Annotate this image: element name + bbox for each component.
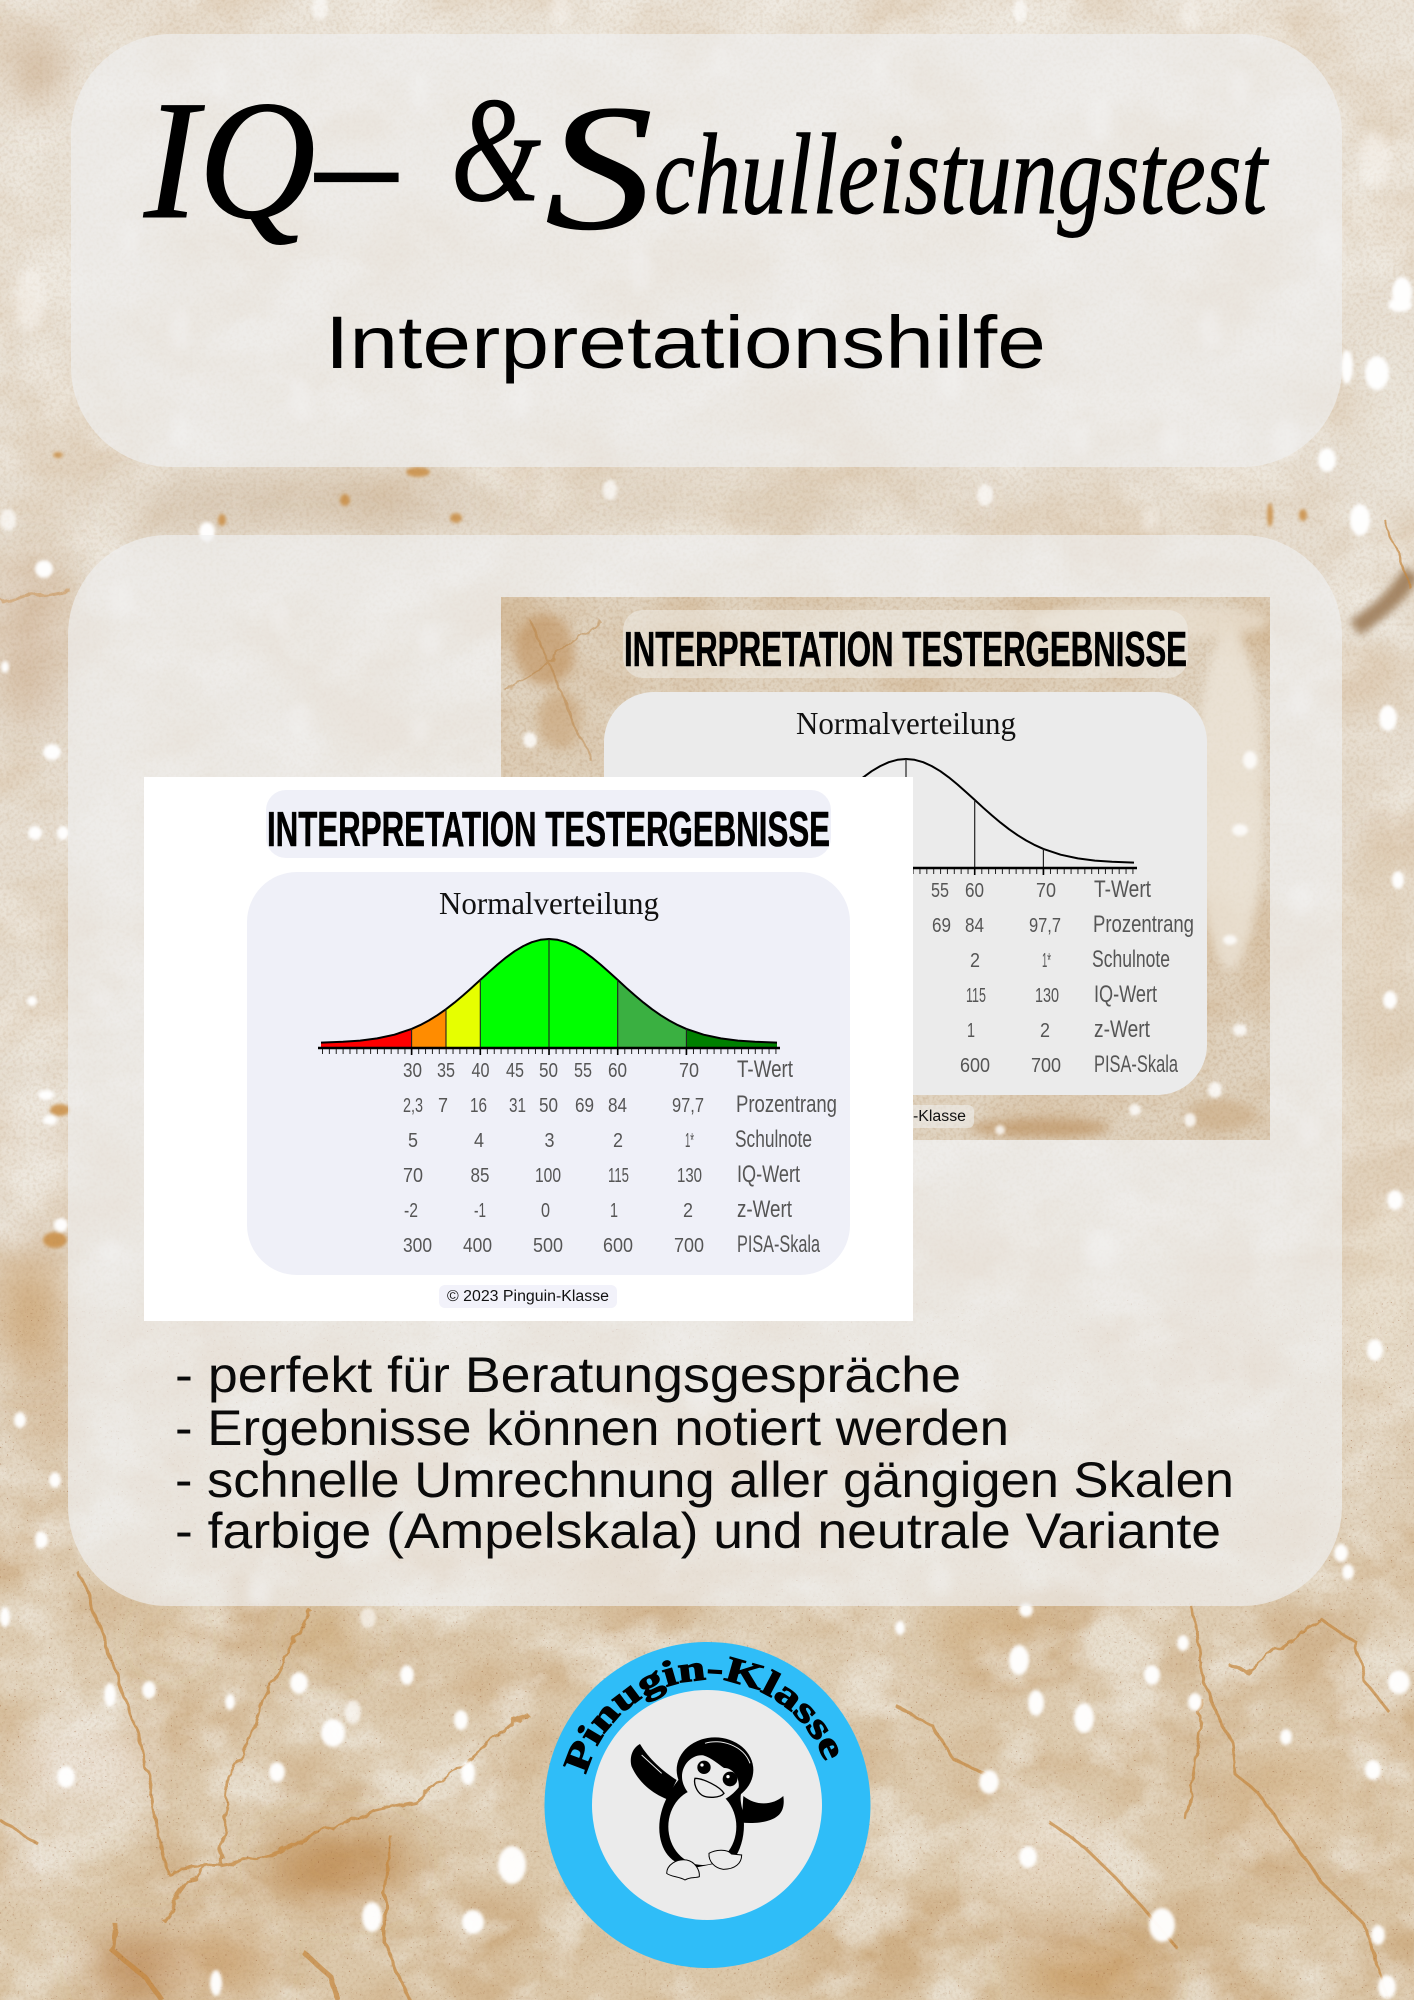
back card chart panel	[604, 692, 1207, 1095]
back card scale table: IQ-Wert	[1094, 981, 1157, 1008]
back card scale table: 600	[960, 1055, 990, 1077]
faint bokeh halos	[14, 0, 1391, 1606]
front card scale table	[403, 1056, 837, 1258]
panel: title background	[71, 34, 1342, 467]
row: PISA-Skala	[403, 1231, 820, 1258]
front card copyright	[439, 1285, 617, 1308]
row: z-Wert: -1	[474, 1200, 486, 1222]
back card scale table	[931, 876, 1194, 1078]
row: Prozentrang: 84	[608, 1095, 627, 1117]
row: Prozentrang	[403, 1091, 837, 1118]
row: Schulnote	[408, 1126, 812, 1153]
back card heading	[623, 610, 1188, 678]
row: PISA-Skala: 500	[533, 1235, 563, 1257]
front card heading	[266, 790, 831, 858]
back card chart panel: Normalverteilung	[796, 705, 1016, 741]
bullet list: - perfekt für Beratungsgespräche	[175, 1347, 961, 1403]
row: PISA-Skala: 400	[463, 1235, 492, 1257]
front card copyright: © 2023 Pinguin-Klasse	[447, 1288, 609, 1305]
bullet list	[175, 1347, 1234, 1559]
back card: neutral chart variant	[501, 597, 1270, 1140]
back card scale table: 70	[1036, 880, 1056, 902]
bullet list: - farbige (Ampelskala) und neutrale Variante	[175, 1503, 1221, 1559]
row: IQ-Wert: 130	[677, 1165, 702, 1187]
front card chart panel: Normalverteilung	[439, 885, 659, 921]
row: z-Wert	[404, 1196, 792, 1223]
row: Schulnote: Schulnote	[735, 1126, 812, 1153]
back card scale table: 84	[965, 915, 984, 937]
row: Schulnote: 1*	[685, 1130, 694, 1152]
row: Prozentrang: 97,7	[672, 1095, 704, 1117]
row: T-Wert: 60	[608, 1060, 627, 1082]
row: T-Wert: 70	[679, 1060, 699, 1082]
row: Prozentrang: 2,3	[403, 1095, 423, 1117]
row: IQ-Wert: 115	[608, 1165, 629, 1187]
front card chart panel	[247, 872, 850, 1275]
front card: coloured chart variant	[144, 777, 913, 1321]
title: IQ- & Schulleistungstest: S	[545, 68, 653, 267]
row: T-Wert: T-Wert	[737, 1056, 793, 1083]
row: z-Wert: z-Wert	[737, 1196, 792, 1223]
back card scale table: 2	[970, 950, 980, 972]
row: IQ-Wert: 85	[470, 1165, 490, 1187]
back card scale table: 69	[932, 915, 951, 937]
coloured bell curve	[318, 938, 780, 1055]
row: T-Wert: 45	[506, 1060, 524, 1082]
row: z-Wert: 1	[610, 1200, 618, 1222]
title: IQ- & Schulleistungstest: &	[451, 67, 541, 233]
back card scale table: 60	[965, 880, 984, 902]
icon: penguin	[631, 1737, 784, 1880]
row: Prozentrang: 7	[438, 1095, 448, 1117]
row: Prozentrang: 16	[470, 1095, 487, 1117]
row: Prozentrang: Prozentrang	[736, 1091, 837, 1118]
bullet list: - Ergebnisse können notiert werden	[175, 1400, 1009, 1456]
subtitle: Interpretationshilfe: Interpretationshilfe	[325, 301, 1046, 384]
front card heading: INTERPRETATION TESTERGEBNISSE	[267, 803, 830, 857]
title: IQ- & Schulleistungstest	[143, 66, 1269, 267]
back card bell curve	[675, 759, 1137, 875]
row: Schulnote: 4	[474, 1130, 484, 1152]
row: Schulnote: 3	[544, 1130, 554, 1152]
row: T-Wert	[403, 1056, 793, 1083]
row: PISA-Skala: 600	[603, 1235, 633, 1257]
row: Prozentrang: 50	[539, 1095, 558, 1117]
back card scale table: 115	[966, 985, 986, 1007]
title: IQ- & Schulleistungstest: chulleistungstest	[654, 111, 1269, 239]
row: IQ-Wert: IQ-Wert	[737, 1161, 800, 1188]
orange flecks	[43, 452, 1307, 1248]
title: IQ- & Schulleistungstest: IQ–	[143, 66, 399, 254]
row: T-Wert: 35	[437, 1060, 455, 1082]
back card scale table: z-Wert	[1094, 1016, 1150, 1043]
row: Prozentrang: 69	[575, 1095, 594, 1117]
row: z-Wert: -2	[404, 1200, 418, 1222]
back card copyright: © 2023 Pinguin-Klasse	[804, 1108, 966, 1125]
row: T-Wert: 55	[574, 1060, 592, 1082]
back card scale table: 55	[931, 880, 949, 902]
row: PISA-Skala: 700	[674, 1235, 704, 1257]
row: IQ-Wert: 100	[535, 1165, 561, 1187]
row: IQ-Wert: 70	[403, 1165, 423, 1187]
back card scale table: Schulnote	[1092, 946, 1170, 973]
back card scale table: Prozentrang	[1093, 911, 1194, 938]
logo badge: Pinugin-Klasse	[544, 1642, 870, 1968]
row: z-Wert: 2	[683, 1200, 693, 1222]
row: IQ-Wert	[403, 1161, 800, 1188]
back card copyright	[796, 1105, 974, 1128]
row: T-Wert: 50	[539, 1060, 558, 1082]
back card scale table: T-Wert	[1094, 876, 1151, 903]
back card scale table: 97,7	[1029, 915, 1061, 937]
back card scale table: 130	[1035, 985, 1059, 1007]
row: Schulnote: 2	[613, 1130, 623, 1152]
panel: main content background	[68, 535, 1342, 1606]
row: PISA-Skala: PISA-Skala	[737, 1231, 820, 1258]
back card scale table: 1	[967, 1020, 975, 1042]
row: T-Wert: 40	[472, 1060, 490, 1082]
bullet list: - schnelle Umrechnung aller gängigen Skalen	[175, 1452, 1234, 1508]
back card scale table: 700	[1031, 1055, 1061, 1077]
row: T-Wert: 30	[403, 1060, 422, 1082]
logo text on arc: Pinugin-Klasse	[562, 1656, 838, 1774]
row: Prozentrang: 31	[509, 1095, 526, 1117]
back card scale table: 1*	[1042, 950, 1051, 972]
row: z-Wert: 0	[541, 1200, 550, 1222]
row: Schulnote: 5	[408, 1130, 418, 1152]
row: PISA-Skala: 300	[403, 1235, 432, 1257]
back card scale table: 2	[1040, 1020, 1050, 1042]
back card scale table: PISA-Skala	[1094, 1051, 1178, 1078]
